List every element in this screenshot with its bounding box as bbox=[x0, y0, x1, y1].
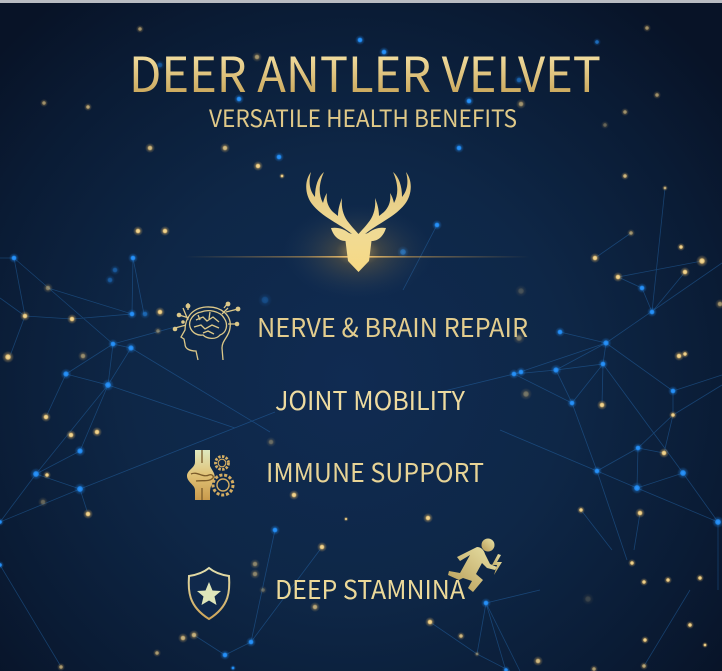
top edge strip bbox=[0, 0, 722, 3]
heading: joint mobility: JOINT MOBILITY bbox=[275, 381, 465, 418]
heading: deep stamina: DEEP STAMNINA bbox=[275, 570, 465, 607]
icon: running figure with lightning bbox=[448, 538, 502, 592]
icon: deer head with antlers bbox=[185, 172, 530, 300]
network lines bbox=[0, 188, 722, 671]
title: DEER ANTLER VELVET bbox=[129, 36, 601, 106]
icon: shield with star bbox=[189, 568, 229, 619]
icon: brain with nodes bbox=[173, 302, 240, 360]
heading: nerve and brain repair: NERVE & BRAIN REPAIR bbox=[257, 308, 528, 345]
subtitle: VERSATILE HEALTH BENEFITS bbox=[209, 99, 517, 134]
heading: immune support: IMMUNE SUPPORT bbox=[266, 453, 484, 490]
icon: knee joint with gears bbox=[187, 450, 233, 500]
